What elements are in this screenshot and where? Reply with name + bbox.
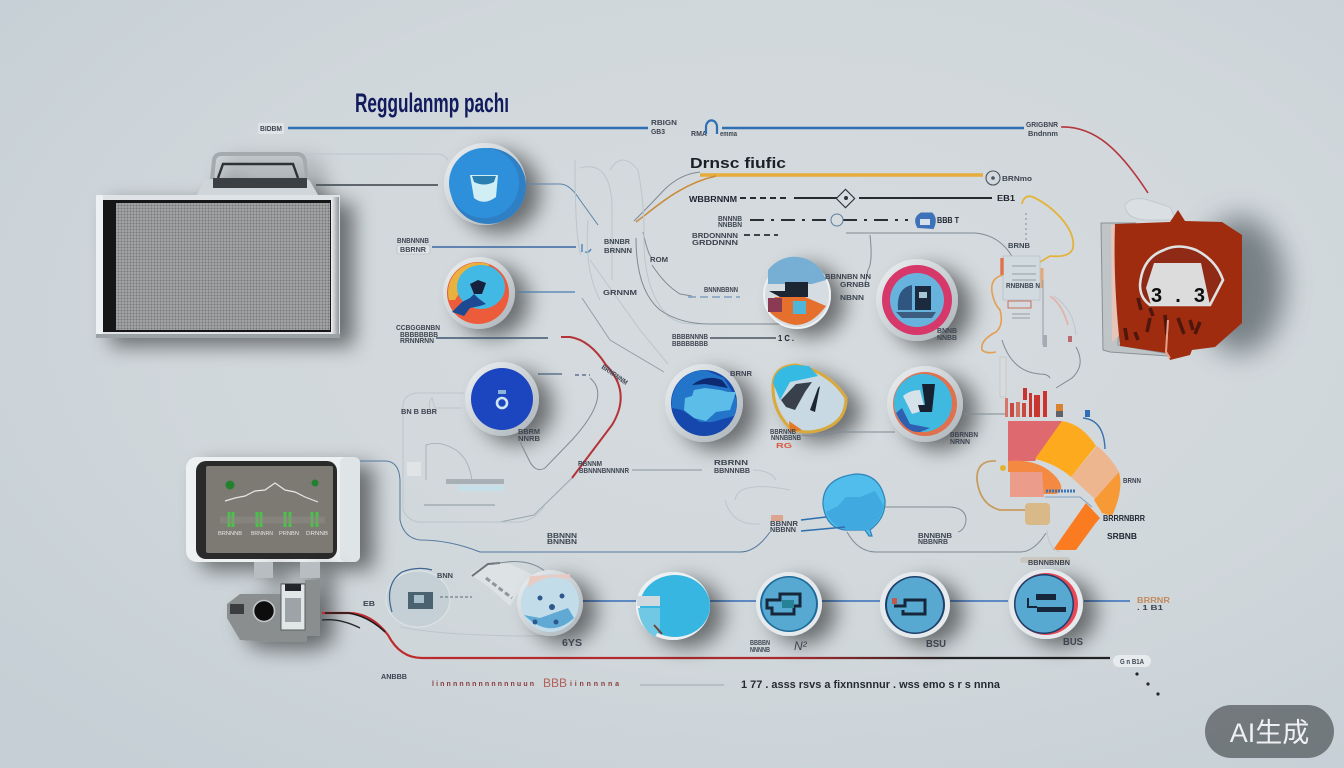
label: sphere callout: NBNN	[840, 295, 864, 302]
node: blue shield	[444, 143, 526, 225]
top timeline: BIDBM	[260, 126, 282, 133]
device: red warning box: 3 . 3	[1151, 285, 1205, 307]
heading: checklist block: NNBBN	[718, 222, 742, 229]
central flow diagram: RNBNBB N	[1006, 283, 1040, 290]
node: cyan blob: NBBNN	[770, 527, 796, 534]
footer text: linnnnnnnnnnnnuun	[432, 681, 534, 688]
node: blue gear three	[1009, 569, 1083, 639]
top timeline	[258, 120, 1148, 193]
device: red warning box	[1101, 199, 1284, 360]
chart: orange arc segments: BBNNBNBN	[1028, 560, 1070, 567]
label: cyan note: BBRNBN	[950, 432, 978, 439]
footer text: 1 77 . asss rsvs a fixnnsnnur . wss emo s r s nnna	[741, 679, 1001, 691]
label: gear two number: BSU	[926, 639, 946, 650]
central flow diagram: BRNB	[1008, 243, 1030, 250]
node: red collage sphere	[764, 257, 830, 328]
connectors: screen and camera: G n B1A	[1120, 659, 1144, 666]
top timeline: Bndnnm	[1028, 131, 1058, 138]
heading: checklist block: BNNNB	[718, 216, 742, 223]
device: monitoring screen: BRNNNB	[218, 531, 243, 537]
heading: checklist block: BRDONNNN	[692, 233, 738, 240]
heading: checklist block: BBB T	[937, 216, 959, 225]
label: crimson ring note: BNNB	[937, 328, 957, 335]
heading: checklist block	[604, 155, 1073, 348]
badge: AI generated	[1205, 705, 1334, 758]
node: cyan blob: NBBNRB	[918, 539, 948, 546]
node: orange blue mountain	[443, 257, 515, 329]
heading: checklist block: EB1	[997, 194, 1016, 203]
label: sphere callout	[825, 274, 871, 302]
title: Reggulanmp pachı	[355, 88, 509, 118]
node: cyan half circle	[636, 572, 710, 640]
heading: checklist block: BRNNN	[604, 248, 632, 255]
label and lines: left column	[396, 160, 668, 522]
top timeline: emma	[720, 131, 737, 138]
device: monitoring screen	[186, 457, 360, 562]
label: gear one note: NNNNB	[750, 647, 770, 654]
heading: checklist block: 1 C .	[778, 334, 794, 343]
lines: pin connectors: NNRB	[518, 436, 540, 443]
label and lines: left column: BNBNNNB	[397, 238, 429, 245]
label and lines: left column: GRNNM	[603, 290, 637, 297]
connectors: screen and camera: RBNNM	[578, 461, 602, 468]
node: cyan blob	[770, 474, 1046, 552]
node: crimson ring icon	[876, 259, 958, 341]
connectors: screen and camera: BN B BBR	[401, 409, 437, 416]
node: cyan blob: BNNBNB	[918, 533, 952, 540]
node: blue world	[665, 364, 743, 442]
label: gear one note: BBBBN	[750, 640, 770, 647]
node: faint glass lens: BNN	[437, 573, 453, 580]
node: dark blue pin	[465, 362, 539, 436]
device: grey arm	[470, 562, 548, 606]
bottom row line: . 1 B1	[1137, 605, 1163, 612]
label: crimson ring note	[937, 328, 957, 342]
bottom row line	[363, 596, 1170, 612]
label: crimson ring note: NNBB	[937, 335, 957, 342]
node: faint glass lens	[386, 568, 545, 636]
lines: pin connectors: BBRM	[518, 429, 540, 436]
top timeline: GRIGBNR	[1026, 122, 1058, 129]
heading: checklist block: BRNmo	[1002, 176, 1032, 183]
bar chart: red mini bars	[1000, 357, 1105, 449]
label: world note: BRNR	[730, 371, 752, 378]
heading: checklist block: BNNNBBNN	[704, 287, 738, 294]
bottom row line: BRRNR	[1137, 596, 1170, 605]
connectors: screen and camera: BBNNN	[547, 533, 577, 540]
lines: pin connectors	[518, 374, 598, 470]
label: map number: 6YS	[562, 638, 582, 649]
heading: checklist block: GRDDNNN	[692, 240, 738, 247]
node: ochre lens	[773, 365, 846, 432]
footer text: BBB	[543, 676, 567, 690]
chart: orange arc segments: BRRRNBRR	[1103, 514, 1145, 523]
device: camera sensor	[227, 562, 320, 642]
connectors: screen and camera: BBNNNBNNNNR	[579, 468, 629, 475]
label: sphere callout: BBNNBN NN	[825, 274, 871, 281]
label: lens note: RG	[776, 443, 793, 450]
heading: checklist block: Drnsc fiufic	[690, 155, 786, 172]
connectors: screen and camera: RBRNN	[714, 460, 748, 467]
device: monitoring screen: DRNNB	[306, 531, 329, 537]
heading: checklist block: WBBRNNM	[689, 195, 737, 204]
chart: orange arc segments	[977, 421, 1145, 567]
heading: checklist block: ROM	[650, 257, 668, 264]
label and lines: left column: BBBBBBBB	[400, 332, 438, 339]
device: monitoring screen: BRNNRN	[251, 531, 273, 537]
label: cyan note: NRNN	[950, 439, 970, 446]
connectors: screen and camera	[322, 393, 1160, 696]
top timeline: RBIGN	[651, 120, 677, 127]
central flow diagram	[982, 210, 1080, 388]
label: gear one note	[750, 639, 808, 654]
device: monitoring screen: PRNBN	[279, 531, 299, 537]
label: lens note	[770, 429, 895, 450]
label: lens note: BBRNNB	[770, 429, 796, 436]
bottom row line: EB	[363, 601, 375, 608]
label: sphere callout: GRNBB	[840, 282, 870, 289]
heading: checklist block: BNNBR	[604, 239, 630, 246]
footer text	[381, 674, 1001, 691]
node: pale blue map	[517, 570, 583, 636]
connector: case to first node	[305, 154, 448, 185]
label: lens note: NNNBBNB	[771, 435, 801, 442]
chart: orange arc segments: SRBNB	[1107, 532, 1137, 541]
heading: checklist block: BBBBNNNB	[672, 334, 708, 341]
node: blue gear two	[880, 572, 950, 638]
node: cyan blob: BBNNR	[770, 521, 798, 528]
label and lines: left column: BRNRNNM	[600, 364, 629, 387]
node: blue gear one	[756, 572, 822, 636]
label and lines: left column: BBRNR	[400, 247, 426, 254]
heading: checklist block: BBBBBBBB	[672, 341, 708, 348]
chart: orange arc segments: BRNN	[1123, 478, 1141, 485]
connectors: screen and camera: BNNBN	[547, 539, 577, 546]
top timeline: GB3	[651, 129, 665, 136]
connectors: screen and camera: BBNNNBB	[714, 468, 750, 475]
footer text: iinnnnna	[570, 681, 619, 688]
label and lines: left column: RRNNRNN	[400, 338, 434, 345]
footer text: ANBBB	[381, 674, 407, 681]
label: cyan note	[950, 414, 1006, 446]
device: grey mesh case	[96, 154, 340, 338]
label and lines: left column: CCBGGBNBN	[396, 325, 440, 332]
badge: AI generated: AI生成	[1230, 718, 1309, 748]
label: gear three number: BUS	[1063, 637, 1083, 648]
node: cyan letter	[887, 366, 963, 442]
label: gear one note: N²	[794, 639, 808, 653]
top timeline: RMA	[691, 131, 707, 138]
